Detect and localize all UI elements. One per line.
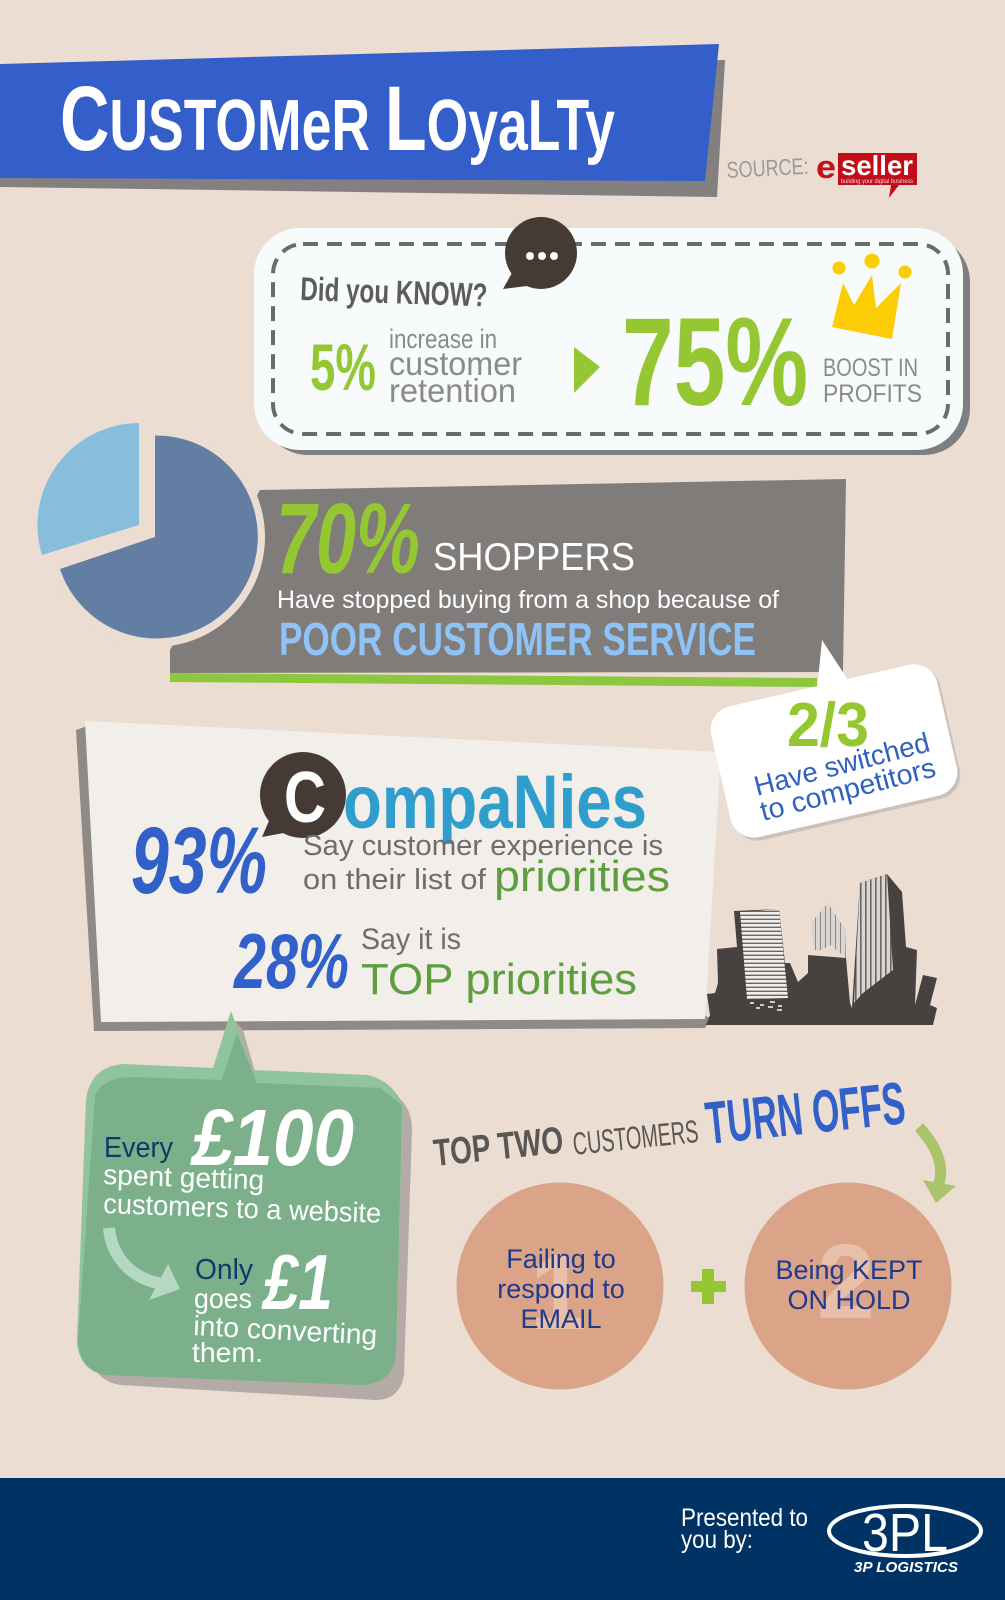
icon: skyline: [706, 874, 937, 1025]
circle: turn off one: respond to: [497, 1274, 625, 1304]
panel: spend callout: [77, 1011, 412, 1400]
icon: plus: [691, 1269, 726, 1304]
icon: crown: [832, 254, 912, 339]
source logo: seller: [841, 150, 913, 181]
circle: turn off one: EMAIL: [520, 1304, 602, 1334]
text: goes into converting: them.: [192, 1337, 263, 1368]
stat: 70 percent: 70%: [276, 483, 420, 595]
arrow: [109, 1228, 180, 1300]
text: customer retention: [389, 324, 522, 409]
stat: 5 percent: 5%: [310, 330, 376, 404]
text: customer retention: customer: [389, 345, 522, 382]
stat: 2/3: 2/3: [787, 691, 869, 760]
title banner: [0, 44, 725, 197]
title: CUSTOMeR LOyaLTy: [60, 68, 615, 170]
label: shoppers: SHOPPERS: [433, 536, 635, 579]
text: only: Only: [195, 1254, 253, 1286]
source logo: SOURCE:: [726, 153, 809, 183]
text: say it is: Say it is: [361, 923, 461, 956]
circle: turn off one: 1: [530, 1231, 586, 1352]
icon: C bubble: C: [284, 758, 326, 838]
icon: speech bubble: [503, 217, 577, 289]
heading: did you know: Did you KNOW?: [300, 270, 488, 314]
heading: top two customers turn offs: CUSTOMERS: [571, 1113, 700, 1162]
text: goes into converting: [192, 1283, 378, 1368]
panel: companies: [76, 721, 721, 1031]
icon: C bubble: [260, 752, 346, 838]
heading: top two customers turn offs: [432, 1069, 908, 1175]
text: say customer experience: on their list of: [303, 864, 487, 896]
footer: [0, 1478, 1005, 1600]
source logo: [726, 149, 917, 198]
panel: shoppers: [170, 479, 846, 687]
text: say customer experience: Say customer experience is: [303, 830, 663, 862]
text: goes into converting: into converting: [193, 1310, 378, 1351]
circle: turn off one: [456, 1182, 664, 1390]
text: have stopped buying: Have stopped buying from a shop because of: [277, 586, 779, 614]
text: customer retention: retention: [389, 372, 516, 409]
text: top priorities: TOP priorities: [361, 955, 637, 1004]
text: boost in profits: PROFITS: [823, 380, 922, 408]
text: presented to you by: you by:: [681, 1526, 753, 1554]
circle: turn off two: [744, 1182, 952, 1390]
arrow: to circles: [919, 1127, 956, 1203]
text: boost in profits: [823, 354, 922, 408]
circle: turn off two: ON HOLD: [787, 1285, 911, 1315]
text: have switched: to competitors: [757, 752, 939, 827]
text: say customer experience: [303, 830, 663, 896]
text: presented to you by: Presented to: [681, 1504, 808, 1532]
stat: 93 percent: 93%: [131, 808, 267, 914]
stat: 75 percent: 75%: [622, 293, 808, 432]
circle: turn off two: Being KEPT: [775, 1255, 923, 1285]
logo: 3PL: [829, 1503, 981, 1576]
text: spent getting: [103, 1159, 382, 1229]
text: spent getting: customers to a website: [103, 1188, 382, 1229]
heading: companies: ompaNies: [343, 760, 647, 845]
text: priorities: priorities: [494, 852, 670, 901]
panel: did you know: [254, 217, 970, 455]
chart: pie: [37, 423, 265, 647]
circle: turn off two: 2: [817, 1223, 875, 1341]
text: boost in profits: BOOST IN: [823, 354, 918, 382]
arrow: [574, 347, 600, 393]
stat: 100 pounds: £100: [190, 1093, 354, 1182]
text: have switched: Have switched: [751, 727, 933, 802]
heading: top two customers turn offs: TOP TWO: [432, 1120, 565, 1175]
logo: 3PL: 3P LOGISTICS: [854, 1559, 958, 1576]
stat: 1 pound: £1: [261, 1238, 333, 1326]
callout: two thirds: [706, 640, 965, 845]
text: every: Every: [104, 1132, 173, 1164]
source logo: building your digital business: [841, 179, 913, 185]
stat: 28 percent: 28%: [233, 917, 349, 1005]
text: presented to you by: [681, 1504, 808, 1554]
text: customer retention: increase in: [389, 324, 497, 354]
source logo: e: [816, 149, 836, 185]
text: poor customer service: POOR CUSTOMER SERVICE: [279, 613, 756, 665]
text: spent getting: spent getting: [103, 1159, 265, 1196]
circle: turn off one: Failing to: [506, 1244, 616, 1274]
logo: 3PL: 3PL: [862, 1503, 948, 1563]
text: goes into converting: goes: [194, 1283, 252, 1314]
